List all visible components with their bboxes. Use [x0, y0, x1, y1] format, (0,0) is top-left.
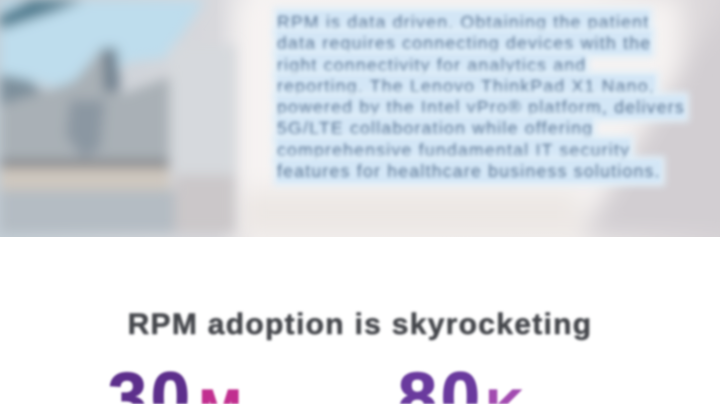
body paragraph: RPM is data driven. Obtaining the patient	[277, 12, 649, 32]
body paragraph: features for healthcare business solutions.	[277, 161, 661, 181]
window sky area and seated figure	[0, 0, 235, 233]
body paragraph: 5G/LTE collaboration while offering	[277, 118, 593, 138]
photo banner with text overlay background	[0, 0, 720, 237]
body paragraph	[270, 6, 692, 189]
stat: 80K	[398, 361, 523, 404]
body paragraph: powered by the Intel vPro® platform, delivers	[277, 97, 685, 117]
stat: 30M	[108, 361, 241, 404]
body paragraph: comprehensive fundamental IT security	[277, 140, 630, 160]
body paragraph: data requires connecting devices with the	[277, 33, 651, 53]
body paragraph: reporting. The Lenovo ThinkPad X1 Nano,	[277, 76, 655, 96]
heading: RPM adoption is skyrocketing	[128, 308, 592, 341]
body paragraph: right connectivity for analytics and	[277, 55, 586, 75]
